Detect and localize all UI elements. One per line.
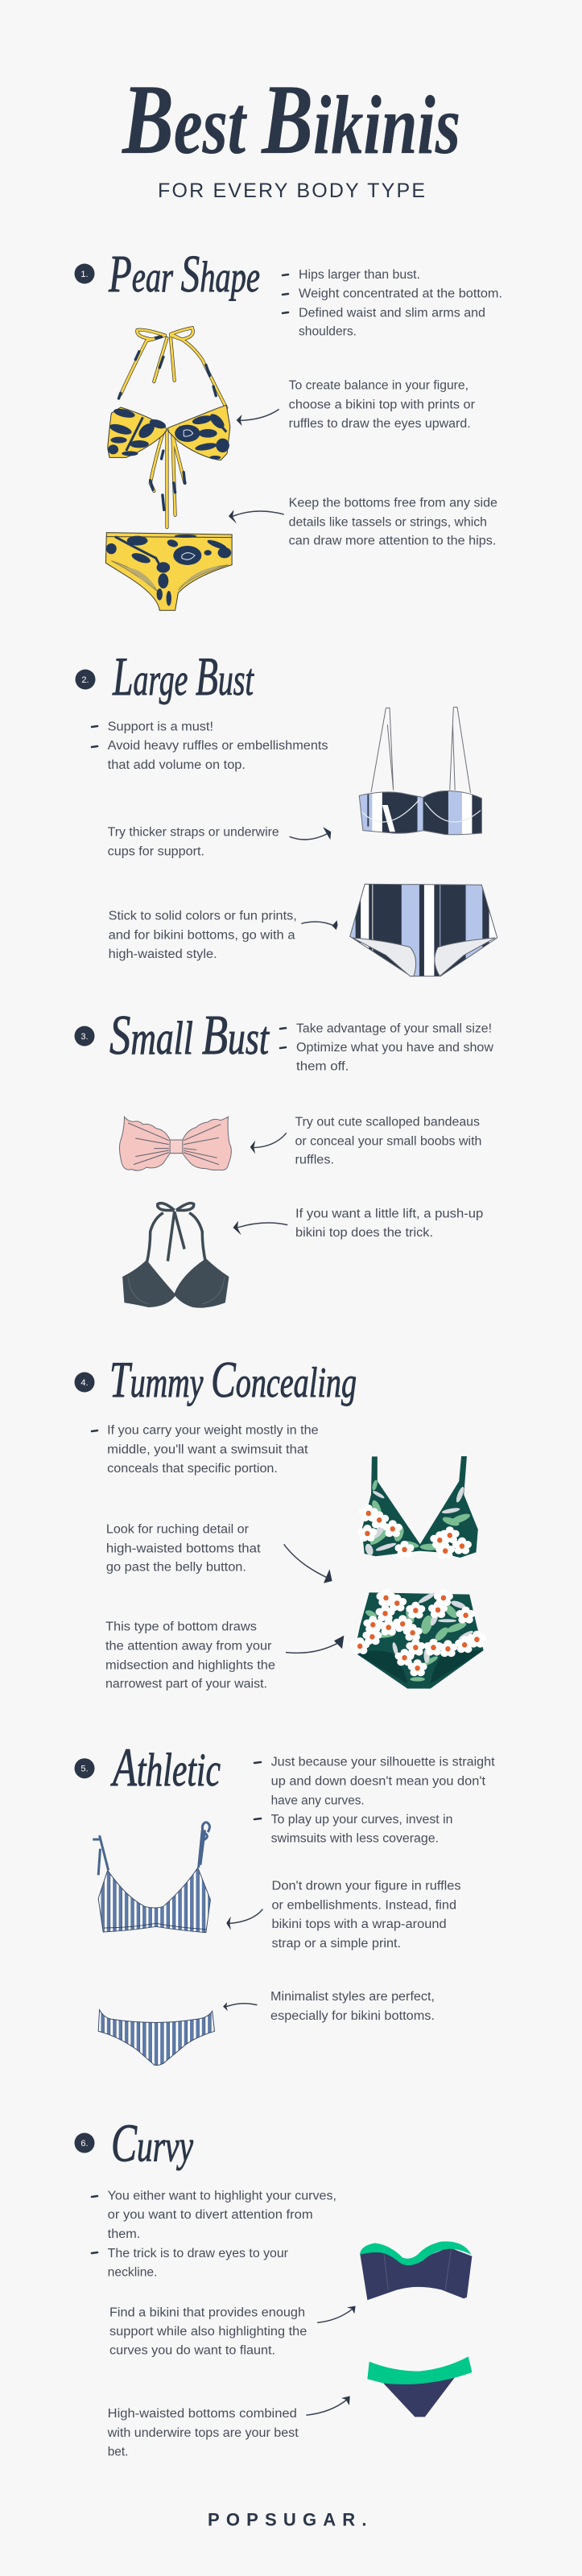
number badge 5: 5. [80,1765,89,1774]
arrow to top [237,409,279,426]
text: draws attention away: narrowest part of your waist. [105,1678,267,1691]
heading: large bust: Large Bust [112,646,254,707]
bullet list: curvy [92,2190,336,2280]
bullet list: curvy: You either want to highlight your curves, [108,2190,336,2202]
number badge 1 [74,264,95,283]
text: don't drown your figure: or embellishments. Instead, find [272,1898,456,1912]
text: balance in your figure: ruffles to draw the eyes upward. [289,417,471,431]
bullet list: pear shape [283,268,502,339]
panel: athletic [74,1736,495,2066]
text: enough support: support while also highlighting the [109,2325,307,2339]
bullet list: athletic: To play up your curves, invest in [271,1813,452,1827]
text: ruching detail: go past the belly button. [106,1561,246,1575]
bullet list: small bust: Optimize what you have and show [296,1041,494,1055]
arrow: attention to bottoms [286,1636,344,1653]
subtitle: FOR EVERY BODY TYPE [158,180,425,202]
arrow to bandeau top [317,2306,356,2322]
illustration: yellow halter top [105,328,232,610]
heading: pear shape: Pear Shape [108,245,260,303]
text: push-up top: bikini top does the trick. [295,1226,433,1240]
text: enough support: Find a bikini that provides enough [109,2306,305,2319]
panel: tummy concealing [74,1351,486,1691]
text: balance in your figure [289,378,475,431]
text: scalloped bandeaus: ruffles. [295,1154,334,1167]
text: draws attention away: This type of bottom draws [105,1620,257,1634]
bullet list: tummy concealing: conceals that specific portion. [107,1462,278,1476]
text: push-up top [295,1207,483,1240]
illustration: blue striped bottom [98,2010,214,2066]
bullet list: large bust: Avoid heavy ruffles or embellishments [108,739,328,753]
panel: pear shape [74,245,502,610]
text: keep bottoms free: can draw more attention to the hips. [289,535,496,548]
illustration: green floral high-waisted bottom [350,1589,486,1689]
text: scalloped bandeaus: or conceal your small boobs with [295,1134,481,1148]
text: solid colors and high waist: Stick to solid colors or fun prints, [109,910,297,923]
brand logo: POPSUGAR. [208,2509,367,2529]
text: don't drown your figure: Don't drown your figure in ruffles [272,1879,461,1893]
number badge 4: 4. [80,1378,89,1388]
bullet list: small bust: them off. [296,1059,349,1073]
bullet list: athletic: Just because your silhouette is straight [271,1756,495,1769]
bullet list: athletic: up and down doesn't mean you don't [271,1775,486,1789]
text: draws attention away [105,1620,275,1691]
text: solid colors and high waist [109,910,297,961]
text: ruching detail: high-waisted bottoms that [106,1542,261,1555]
number badge 1: 1. [80,270,89,279]
bullet list: curvy: neckline. [108,2265,158,2280]
arrow to striped bottom [223,2002,257,2011]
bullet list: tummy concealing: If you carry your weight mostly in the [107,1424,319,1438]
title: Best Bikinis [121,64,460,175]
heading: curvy: Curvy [111,2114,193,2174]
arrow: ruching to bottoms [284,1544,332,1583]
arrow to striped top [290,827,331,840]
text: high-waisted bottoms: bet. [108,2446,129,2459]
bullet list: tummy concealing: middle, you'll want a swimsuit that [107,1443,308,1456]
bullet list: small bust: Take advantage of your small size! [296,1022,492,1035]
bullet list: pear shape: Weight concentrated at the bottom. [299,287,502,300]
illustration: striped high-waisted bottom [349,883,499,976]
text: draws attention away: midsection and highlights the [105,1658,275,1672]
bullet list: athletic: swimsuits with less coverage. [271,1832,439,1846]
text: high-waisted bottoms: with underwire tops are your best [107,2426,299,2440]
text: keep bottoms free [289,496,497,548]
bullet list: pear shape: Defined waist and slim arms and [299,306,485,320]
text: thicker straps [108,825,279,858]
illustration: green floral top [357,1456,478,1559]
text: enough support [109,2306,307,2357]
arrow to bandeau [250,1133,287,1154]
text: high-waisted bottoms: High-waisted bottoms combined [108,2407,297,2421]
illustration: navy and green bottom [367,2356,472,2417]
text: keep bottoms free: details like tassels or strings, which [289,515,487,529]
heading: tummy concealing: Tummy Concealing [109,1351,357,1408]
bullet list: pear shape: Hips larger than bust. [299,268,420,282]
text: thicker straps: Try thicker straps or underwire [108,825,279,839]
text: push-up top: If you want a little lift, a push-up [295,1207,483,1220]
panel: large bust [76,646,499,976]
number badge 6 [74,2133,95,2153]
bullet list: curvy: them. [108,2227,140,2241]
text: balance in your figure: choose a bikini top with prints or [289,398,475,411]
illustration: pink scalloped bandeau [119,1117,231,1170]
number badge 6: 6. [80,2139,89,2149]
bullet list: athletic [254,1756,495,1846]
number badge 5 [74,1758,95,1778]
illustration: navy and green bandeau top [360,2241,472,2300]
heading: small bust: Small Bust [109,1005,270,1067]
bullet list: small bust [280,1022,494,1073]
text: minimalist styles: especially for bikini bottoms. [270,2009,435,2023]
text: thicker straps: cups for support. [108,844,204,858]
number badge 4 [74,1372,95,1393]
panel: curvy [74,2114,472,2459]
text: draws attention away: the attention away from your [105,1639,272,1653]
number badge 2 [76,670,95,689]
text: scalloped bandeaus: Try out cute scalloped bandeaus [295,1115,480,1129]
arrow to striped top [226,1909,262,1930]
text: don't drown your figure [272,1879,461,1951]
arrow to striped bottom [301,920,338,930]
text: don't drown your figure: bikini tops with a wrap-around [272,1918,447,1931]
illustration: dark halter push-up top [122,1203,229,1308]
text: high-waisted bottoms [107,2407,299,2459]
text: solid colors and high waist: and for bikini bottoms, go with a [109,929,295,943]
text: solid colors and high waist: high-waisted style. [109,947,217,961]
panel: small bust [74,1005,494,1308]
text: balance in your figure: To create balance in your figure, [289,378,468,392]
bullet list: athletic: have any curves. [271,1794,365,1807]
text: minimalist styles: Minimalist styles are perfect, [270,1990,435,2004]
text: scalloped bandeaus [295,1115,481,1167]
text: minimalist styles [270,1990,435,2023]
bullet list: tummy concealing [92,1424,319,1476]
text: ruching detail [106,1522,261,1575]
illustration: blue striped tie-strap top [93,1822,210,1933]
number badge 2: 2. [81,675,89,685]
bullet list: large bust [92,720,328,772]
arrow to bottoms [229,510,284,524]
bullet list: large bust: Support is a must! [108,720,213,733]
text: enough support: curves you do want to flaunt. [109,2344,275,2357]
number badge 3: 3. [80,1032,89,1042]
text: ruching detail: Look for ruching detail or [106,1522,249,1536]
arrow to bottoms [306,2396,350,2415]
bullet list: large bust: that add volume on top. [108,758,246,772]
bullet list: curvy: or you want to divert attention from [108,2208,313,2222]
bullet list: curvy: The trick is to draw eyes to your [108,2247,288,2260]
text: don't drown your figure: strap or a simple print. [272,1937,401,1951]
bullet list: pear shape: shoulders. [299,325,357,339]
illustration: striped underwire top [357,707,485,837]
number badge 3 [74,1026,95,1046]
text: keep bottoms free: Keep the bottoms free from any side [289,496,497,510]
heading: athletic: Athletic [110,1736,221,1798]
arrow to push-up top [233,1221,287,1235]
